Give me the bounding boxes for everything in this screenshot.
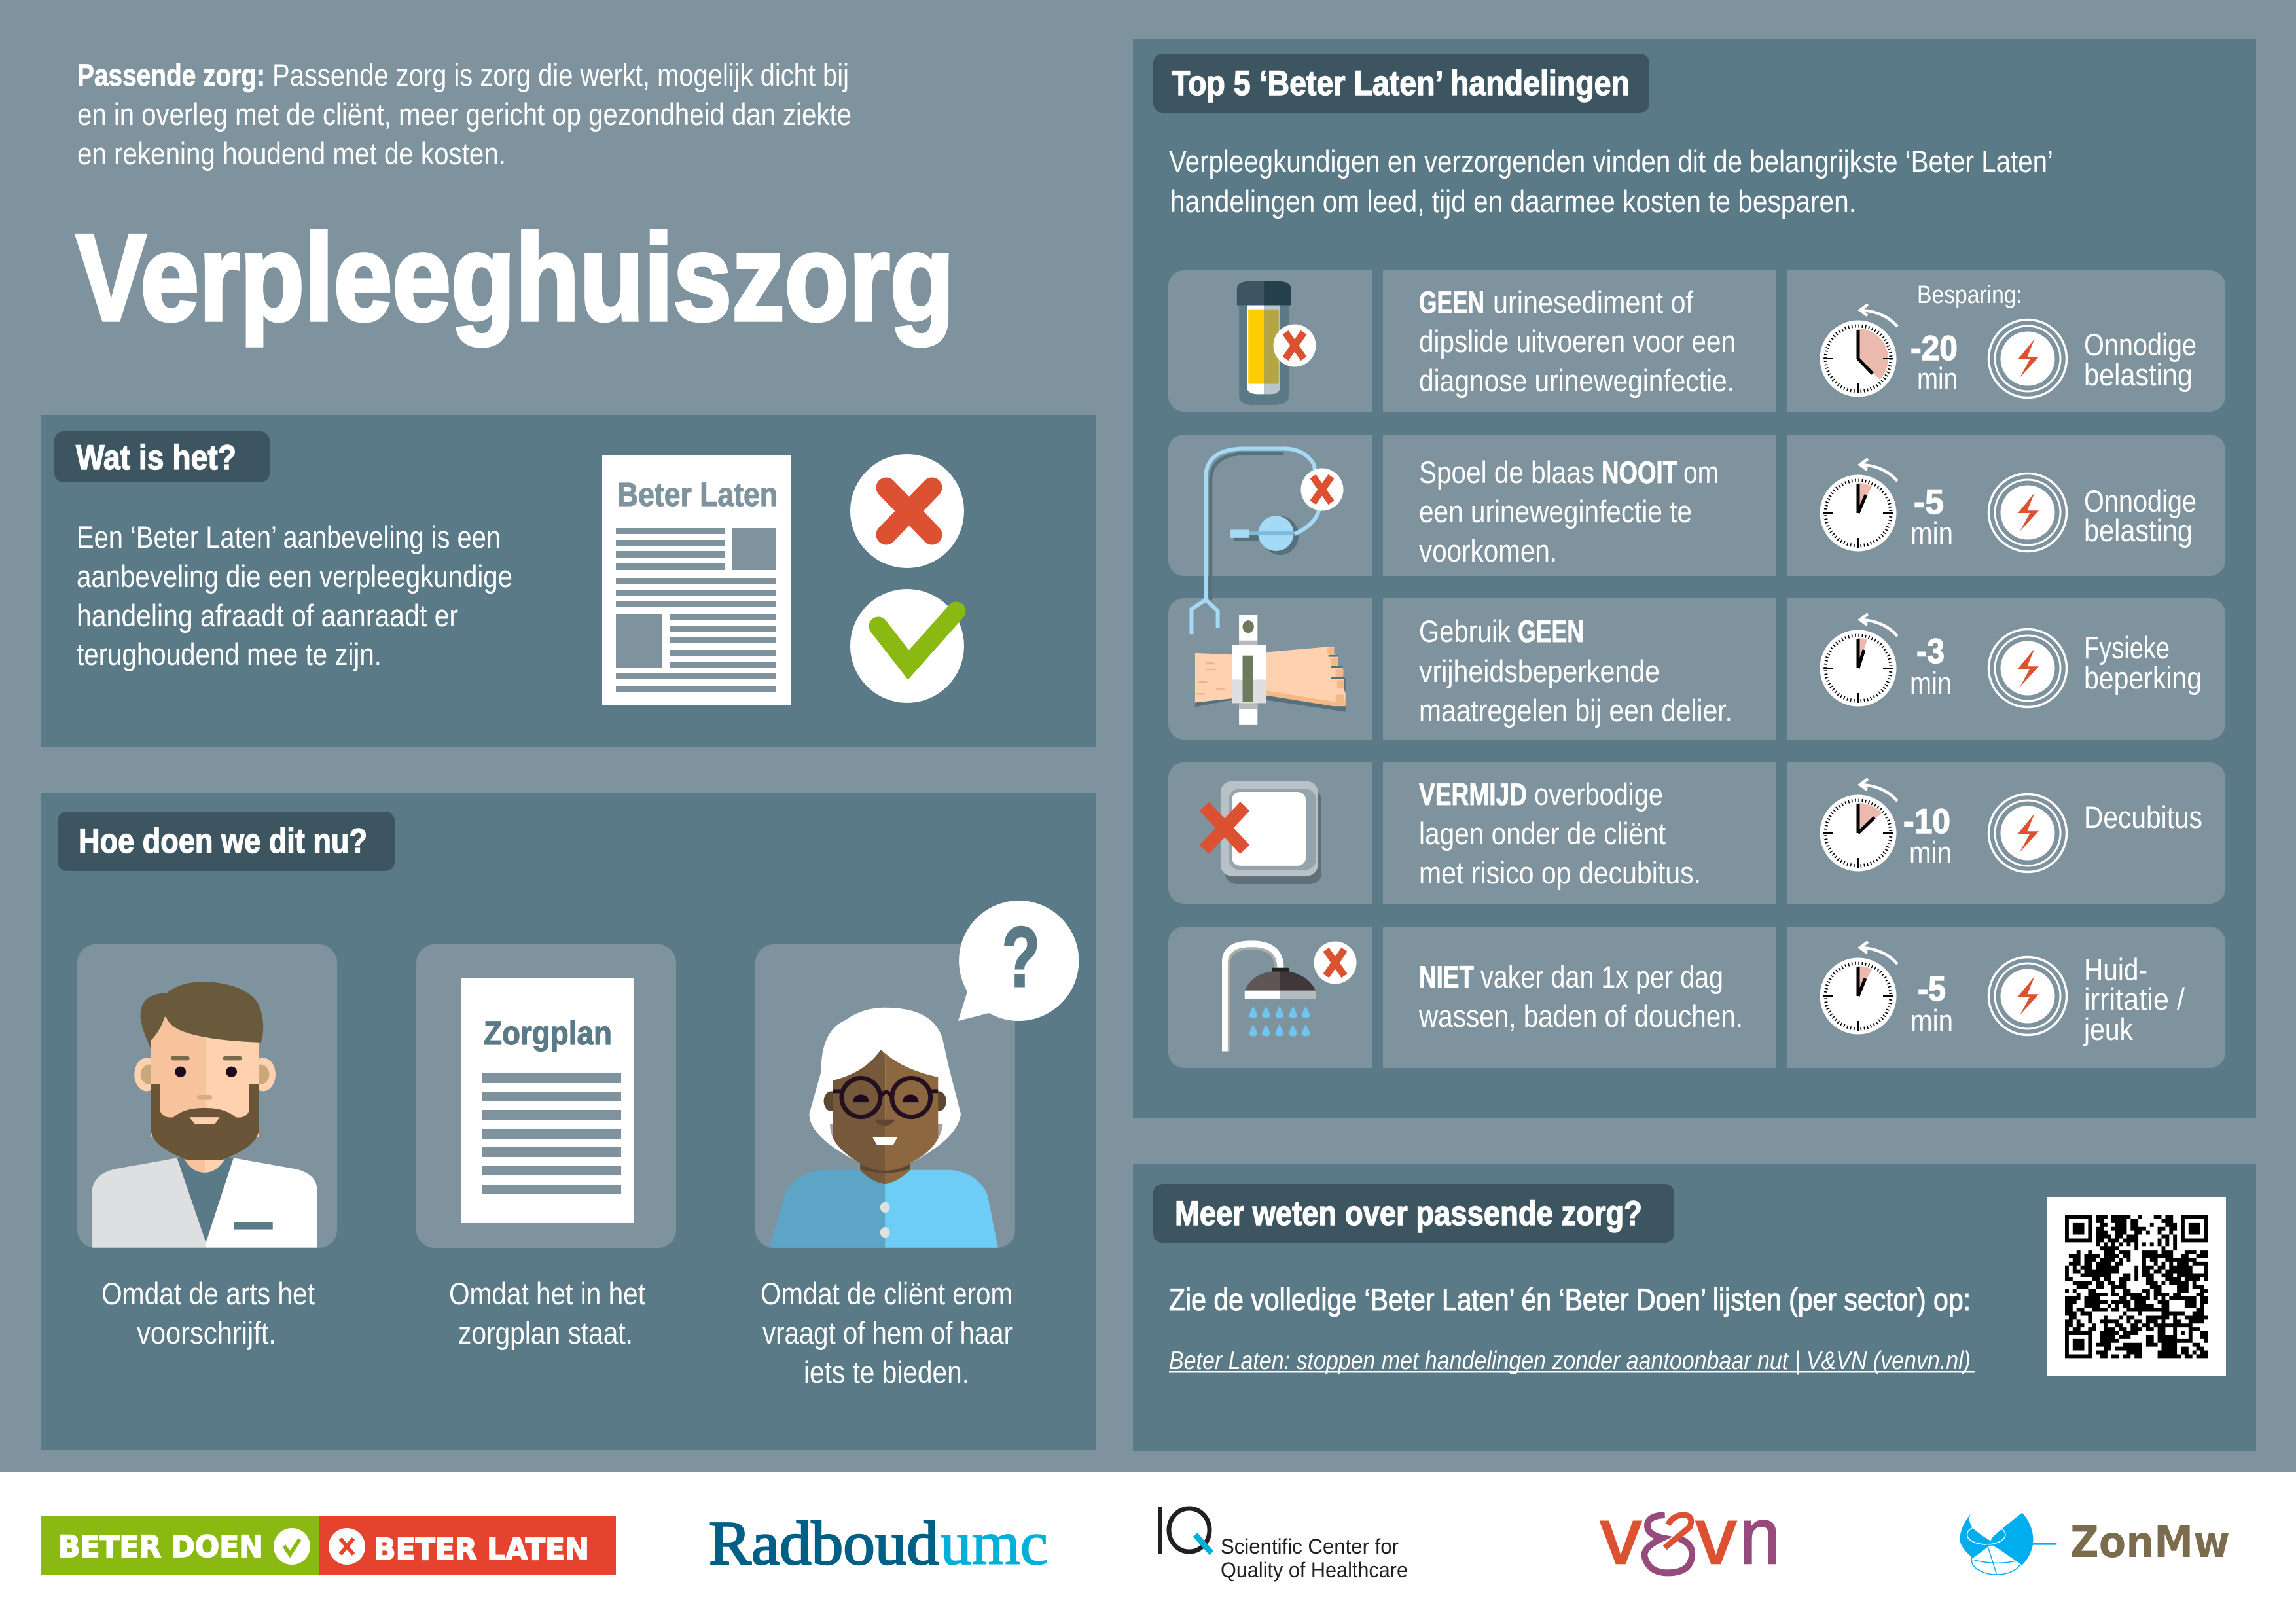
icon: burden bolt bbox=[1988, 794, 2067, 872]
row 4 backgrounds bbox=[1168, 762, 2225, 904]
icon: burden bolt bbox=[1988, 474, 2067, 551]
heading: hoe doen we dit nu: Hoe doen we dit nu? bbox=[79, 822, 367, 861]
text: row 3: maatregelen bij een delier. bbox=[1419, 693, 1732, 728]
value: -5 min: -5 bbox=[1914, 483, 1944, 522]
icon: zorgplan document bbox=[461, 978, 634, 1223]
icon: clock -10 min bbox=[1820, 779, 1897, 872]
text: row 4: VERMIJD bbox=[1419, 777, 1527, 812]
text: row 4: lagen onder de cliënt bbox=[1419, 816, 1666, 851]
text: row 5: vaker dan 1x per dag bbox=[1480, 959, 1723, 994]
text: uitleg beter laten: aanbeveling die een verpleegkundige bbox=[77, 559, 512, 594]
icon: clock -20 min bbox=[1820, 304, 1897, 397]
text: uitleg beter laten: terughoudend mee te zijn. bbox=[77, 637, 382, 671]
caption: zorgplan: zorgplan staat. bbox=[458, 1315, 633, 1350]
caption: client bbox=[761, 1276, 1013, 1389]
text: row 2: een urineweginfectie te bbox=[1419, 494, 1692, 529]
heading: wat is het bbox=[54, 431, 270, 482]
text: row 1 bbox=[1419, 285, 1736, 398]
card: arts bbox=[77, 944, 337, 1248]
icon: document beter laten bbox=[602, 455, 791, 705]
text: uitleg beter laten: handeling afraadt of aanraadt er bbox=[77, 598, 458, 633]
panel: top 5 bbox=[1133, 39, 2256, 1118]
text: introductie top 5: handelingen om leed, tijd en daarmee kosten te besparen. bbox=[1170, 184, 1856, 219]
caption: zorgplan: Omdat het in het bbox=[449, 1276, 645, 1311]
icon: speech bubble with question mark bbox=[958, 901, 1079, 1021]
text: row 2 bbox=[1419, 455, 1719, 568]
label: fysieke beperking bbox=[2084, 630, 2202, 695]
value: -10 min: -10 bbox=[1903, 802, 1950, 841]
icon: pillow layers bbox=[1204, 781, 1321, 884]
icon: clock -3 min bbox=[1820, 614, 1897, 707]
icon: shower bbox=[1226, 941, 1356, 1051]
logo: radboudumc bbox=[709, 1508, 1048, 1578]
logo: beter doen: BETER DOEN bbox=[58, 1529, 263, 1564]
text: row 5: NIET bbox=[1419, 959, 1474, 994]
label: onnodige belasting: belasting bbox=[2084, 513, 2193, 548]
icon: red cross bbox=[850, 454, 964, 568]
label: decubitus: Decubitus bbox=[2084, 800, 2202, 834]
value: -20 min bbox=[1910, 329, 1958, 396]
card: zorgplan bbox=[416, 944, 676, 1248]
icon: catheter bbox=[1191, 449, 1343, 634]
footer bbox=[0, 1472, 2296, 1623]
caption: client: vraagt of hem of haar bbox=[762, 1315, 1013, 1350]
label: huid-irritatie / jeuk: Huid- bbox=[2084, 952, 2147, 987]
text: volledige lijsten: Zie de volledige ‘Beter Laten’ én ‘Beter Doen’ lijsten (per sector) op: bbox=[1169, 1282, 1971, 1317]
heading: meer weten: Meer weten over passende zorg? bbox=[1175, 1194, 1642, 1233]
illustration: client bbox=[769, 1008, 998, 1248]
icon: speech bubble with question mark: ? bbox=[1002, 909, 1040, 1005]
text: row 4 bbox=[1419, 777, 1701, 890]
text: row 3 bbox=[1419, 614, 1732, 728]
icon: green check bbox=[850, 589, 966, 703]
icon: zorgplan document: Zorgplan bbox=[484, 1014, 612, 1052]
text: row 4: overbodige bbox=[1534, 777, 1663, 812]
heading: top 5 bbox=[1153, 54, 1649, 113]
label: onnodige belasting: Onnodige bbox=[2084, 484, 2197, 518]
logo: v&vn bbox=[1600, 1491, 1780, 1580]
caption: zorgplan bbox=[449, 1276, 645, 1350]
text: row 1: urinesediment of bbox=[1493, 285, 1694, 319]
text: row 5 bbox=[1418, 959, 1743, 1033]
icon: clock -5 min bbox=[1820, 459, 1897, 551]
panel: meer weten bbox=[1133, 1164, 2256, 1451]
label: fysieke beperking: beperking bbox=[2084, 660, 2202, 695]
logo: v&vn: n bbox=[1740, 1491, 1780, 1580]
logo: zonmw: ZonMw bbox=[2070, 1517, 2230, 1567]
label: besparing: Besparing: bbox=[1917, 281, 2022, 309]
QR code bbox=[2047, 1197, 2226, 1376]
label: huid-irritatie / jeuk: irritatie / bbox=[2084, 982, 2185, 1016]
logo: radboudumc: umc bbox=[941, 1508, 1048, 1578]
value: -5 min bbox=[1910, 483, 1953, 550]
logo: IQ: Quality of Healthcare bbox=[1221, 1558, 1408, 1582]
text: row 3: Gebruik bbox=[1419, 614, 1511, 649]
icon: urine tube bbox=[1237, 281, 1316, 405]
value: -5 min: -5 bbox=[1918, 970, 1946, 1008]
illustration: arts bbox=[92, 982, 317, 1248]
logo: IQ bbox=[1158, 1507, 1408, 1582]
icon: burden bolt bbox=[1988, 319, 2067, 398]
value: -3 min bbox=[1910, 632, 1952, 700]
icon: document beter laten: Beter Laten bbox=[617, 476, 778, 513]
value: -5 min bbox=[1910, 970, 1953, 1038]
text: row 1: GEEN bbox=[1419, 285, 1484, 319]
logo: beter laten: BETER LATEN bbox=[374, 1532, 589, 1567]
label: huid-irritatie / jeuk bbox=[2083, 952, 2185, 1046]
value: -5 min: min bbox=[1910, 1003, 1953, 1038]
logo: radboudumc: Radboud bbox=[709, 1508, 939, 1578]
icon: burden bolt bbox=[1988, 957, 2067, 1035]
row 1 backgrounds bbox=[1168, 270, 2225, 412]
card: client bbox=[755, 901, 1079, 1248]
logo: v&vn: v bbox=[1600, 1491, 1641, 1580]
logo: beter doen bbox=[41, 1516, 319, 1575]
row 2 backgrounds bbox=[1168, 435, 2225, 576]
text: row 3: GEEN bbox=[1518, 614, 1584, 649]
row 5 backgrounds bbox=[1168, 927, 2225, 1068]
logo: zonmw bbox=[1960, 1513, 2230, 1575]
heading: top 5: Top 5 ‘Beter Laten’ handelingen bbox=[1172, 64, 1630, 103]
caption: arts: voorschrijft. bbox=[137, 1315, 276, 1350]
title: Verpleeghuiszorg bbox=[76, 209, 954, 346]
text: row 4: met risico op decubitus. bbox=[1419, 855, 1701, 890]
text: introductie top 5 bbox=[1169, 144, 2053, 219]
text: row 1: dipslide uitvoeren voor een bbox=[1419, 324, 1736, 359]
value: -5 min: min bbox=[1910, 516, 1953, 550]
heading: wat is het: Wat is het? bbox=[76, 438, 236, 477]
logo: v&vn: v bbox=[1696, 1491, 1736, 1580]
label: onnodige belasting bbox=[2084, 484, 2197, 548]
logo: IQ: Scientific Center for bbox=[1221, 1535, 1399, 1558]
value: -10 min: min bbox=[1909, 835, 1952, 870]
value: -3 min: min bbox=[1910, 666, 1952, 700]
label: onnodige belasting: belasting bbox=[2084, 357, 2193, 392]
intro text bbox=[77, 58, 852, 171]
text: row 2: Spoel de blaas bbox=[1419, 455, 1594, 490]
label: onnodige belasting: Onnodige bbox=[2084, 327, 2197, 362]
panel: wat is het bbox=[41, 415, 1096, 747]
caption: arts bbox=[101, 1276, 315, 1350]
icon: burden bolt bbox=[1988, 630, 2067, 707]
icon: wrist restraint bbox=[1195, 615, 1346, 725]
text: row 5: wassen, baden of douchen. bbox=[1418, 999, 1743, 1033]
value: -20 min: min bbox=[1917, 361, 1958, 396]
label: onnodige belasting bbox=[2084, 327, 2197, 392]
caption: arts: Omdat de arts het bbox=[101, 1276, 315, 1311]
text: row 2: om bbox=[1683, 455, 1719, 490]
link: Beter Laten: stoppen met handelingen zonder aantoonbaar nut | V&VN (venvn.nl) bbox=[1169, 1347, 1971, 1375]
heading: hoe doen we dit nu bbox=[58, 812, 395, 871]
value: -20 min: -20 bbox=[1910, 329, 1958, 368]
label: huid-irritatie / jeuk: jeuk bbox=[2083, 1012, 2133, 1046]
text: introductie top 5: Verpleegkundigen en verzorgenden vinden dit de belangrijkste ‘Beter Laten’ bbox=[1169, 144, 2053, 179]
value: -10 min bbox=[1903, 802, 1952, 870]
text: row 2: NOOIT bbox=[1602, 455, 1677, 490]
panel: hoe doen we dit nu bbox=[41, 793, 1096, 1450]
text: row 3: vrijheidsbeperkende bbox=[1419, 654, 1660, 688]
logo: beter laten bbox=[319, 1516, 616, 1575]
intro text: en in overleg met de cliënt, meer gericht op gezondheid dan ziekte bbox=[77, 97, 852, 132]
intro text: Passende zorg: bbox=[77, 58, 265, 92]
text: row 1: diagnose urineweginfectie. bbox=[1419, 363, 1734, 398]
text: uitleg beter laten bbox=[77, 520, 512, 671]
caption: client: Omdat de cliënt erom bbox=[761, 1276, 1013, 1311]
intro text: Passende zorg is zorg die werkt, mogelijk dicht bij bbox=[272, 58, 849, 92]
intro text: en rekening houdend met de kosten. bbox=[77, 136, 506, 171]
caption: client: iets te bieden. bbox=[804, 1355, 969, 1389]
heading: meer weten bbox=[1153, 1184, 1674, 1243]
icon: clock -5 min bbox=[1820, 942, 1897, 1034]
label: fysieke beperking: Fysieke bbox=[2084, 630, 2170, 665]
text: row 2: voorkomen. bbox=[1419, 533, 1557, 568]
text: uitleg beter laten: Een ‘Beter Laten’ aanbeveling is een bbox=[77, 520, 501, 554]
value: -3 min: -3 bbox=[1916, 632, 1945, 671]
row 3 backgrounds bbox=[1168, 598, 2225, 740]
